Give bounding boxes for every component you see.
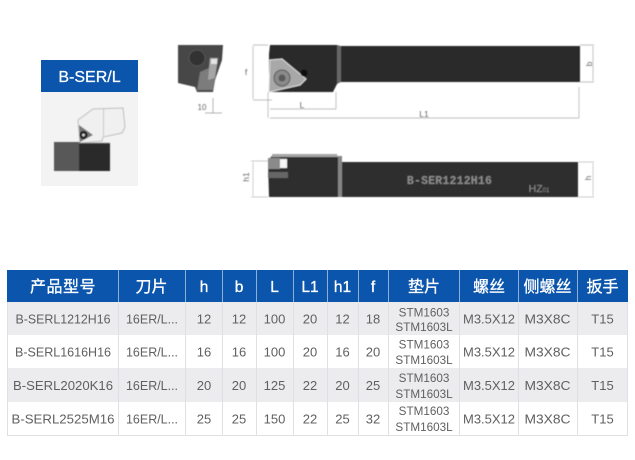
row 3: 22 [303,378,317,393]
row 4: T15 [591,412,614,426]
row 4: STM1603L [395,421,453,434]
row 4: 32 [366,412,380,426]
row 3: 125 [264,378,285,393]
row 3: STM1603 [399,372,449,385]
row 1: 20 [303,312,317,326]
row 1: 18 [366,312,380,326]
row 2: B-SERL1616H16 [15,344,111,360]
row 2: M3X8C [524,344,570,360]
row 4: M3.5X12 [463,412,515,426]
dimension labels: L1 [419,109,429,119]
row 2: STM1603 [399,338,449,352]
row 1: 12 [197,312,211,326]
card title: B-SER/L [58,69,121,86]
row 1: STM1603 [399,306,449,320]
table header: 螺丝 [473,278,505,296]
row 1: M3X8C [524,312,570,326]
table header: 扳手 [586,277,619,296]
row 2: T15 [591,344,614,360]
row 1: B-SERL1212H16 [16,312,110,326]
row 2: 16 [197,344,211,360]
side view of holder [241,154,594,197]
dimension labels: b [584,61,594,66]
row 3: B-SERL2020K16 [13,378,113,393]
row 3: 20 [197,378,211,393]
row 4: 25 [232,412,246,426]
table header: L [270,279,279,296]
dimensions [251,161,594,197]
row 3: M3X8C [524,378,570,393]
insert [269,59,306,92]
top view of holder [245,45,594,119]
row 2 [15,338,614,367]
row 2: M3.5X12 [463,344,515,360]
row 3: 20 [335,378,350,393]
table header: h1 [334,279,351,296]
row backgrounds [7,302,628,435]
row 1: T15 [591,312,614,326]
specification table [7,270,628,436]
row 2: 100 [264,344,285,360]
dimension labels: h1 [241,172,251,182]
dimension labels [241,172,593,182]
row 3: 25 [366,378,380,393]
row 3: 16ER/L... [126,378,178,393]
table header: 产品型号 [30,278,96,296]
row 2: STM1603L [395,354,453,367]
table header: 刀片 [135,278,168,296]
dimension labels: f [245,67,248,77]
row 2: 16 [335,344,350,360]
table header [7,270,628,302]
table header: b [235,279,243,296]
row 3: STM1603L [395,388,453,401]
row 4: B-SERL2525M16 [12,412,114,426]
row 4: STM1603 [399,405,449,418]
row 4 [12,405,614,434]
row 1: 12 [232,312,246,326]
dimension labels [245,61,594,119]
row 2: 20 [303,344,317,360]
dimensions [253,45,594,118]
row 4: M3X8C [524,412,570,426]
engraved logo: HZ01 [529,183,550,195]
table header: 侧螺丝 [523,278,572,296]
dimension labels: L [300,100,305,110]
row 1 [16,306,614,334]
row 3 [13,372,614,401]
row 1: 16ER/L... [126,312,178,326]
end view of holder [178,45,223,113]
dimension: 10: 10 [198,103,207,112]
table header: f [371,279,376,296]
row 4: 25 [335,412,350,426]
icon: holder and workpiece [54,108,125,171]
table header: L1 [301,279,319,296]
dimension labels: h [583,175,593,180]
row 2: 20 [366,344,380,360]
table header: h [200,279,208,296]
row 3: T15 [591,378,614,393]
row 1: STM1603L [395,321,453,334]
table header: 垫片 [408,278,440,296]
row 3: 20 [232,378,246,393]
row 1: M3.5X12 [463,312,515,326]
row 2: 16ER/L... [126,344,178,360]
row 4: 16ER/L... [126,412,178,426]
row 2: 16 [232,344,246,360]
engraved marking: B-SER1212H16 [407,175,492,188]
row 4: 25 [197,412,211,426]
row 4: 150 [264,412,285,426]
row 4: 22 [303,412,317,426]
row 1: 100 [264,312,285,326]
product card: B-SER/L [41,60,138,186]
row 1: 12 [335,312,350,326]
row 3: M3.5X12 [463,378,515,393]
